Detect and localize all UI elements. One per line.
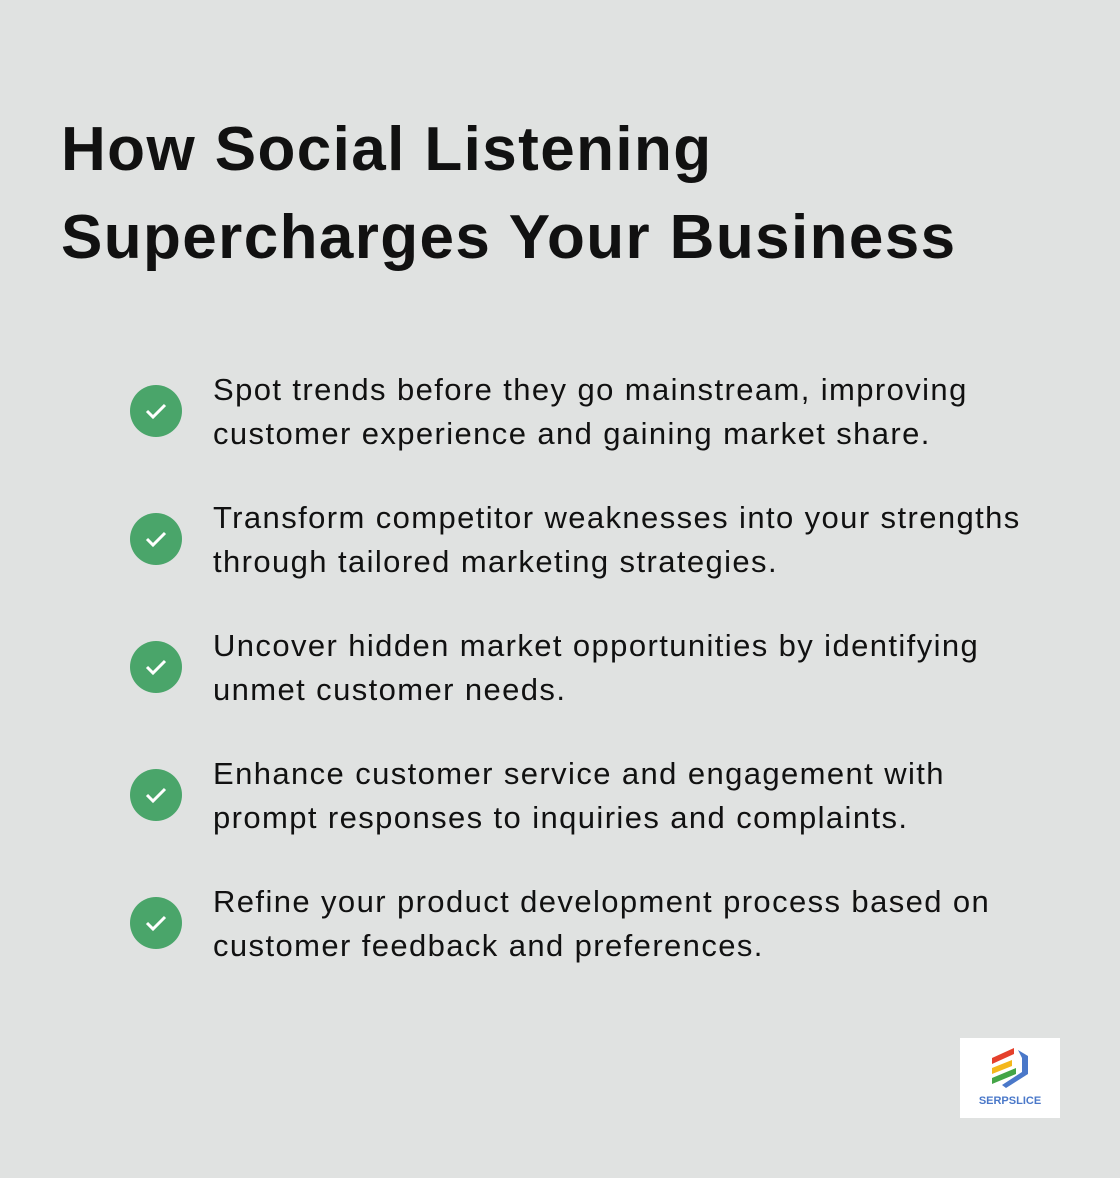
item 5 [130, 884, 990, 963]
icon: check [130, 769, 182, 821]
text 5: Refine your product development process based on [213, 884, 990, 919]
text 5: customer feedback and preferences. [213, 928, 764, 963]
item 3 [130, 628, 979, 707]
icon: check [130, 641, 182, 693]
text 2: through tailored marketing strategies. [213, 544, 778, 579]
text 4: prompt responses to inquiries and complaints. [213, 800, 908, 835]
text 1: Spot trends before they go mainstream, improving [213, 372, 968, 407]
item 1 [130, 372, 968, 451]
text 4: Enhance customer service and engagement with [213, 756, 945, 791]
item 2 [130, 500, 1021, 579]
logo [960, 1038, 1060, 1118]
title [61, 115, 957, 272]
text 3: Uncover hidden market opportunities by identifying [213, 628, 979, 663]
text 3 [213, 628, 979, 707]
item 4 [130, 756, 945, 835]
text 1: customer experience and gaining market share. [213, 416, 931, 451]
title: Supercharges Your Business [61, 203, 957, 272]
logo: SERPSLICE [979, 1095, 1041, 1107]
text 4 [213, 756, 945, 835]
title: How Social Listening [61, 115, 713, 184]
icon: check [130, 385, 182, 437]
text 3: unmet customer needs. [213, 672, 566, 707]
text 2 [213, 500, 1021, 579]
icon: check [130, 513, 182, 565]
text 2: Transform competitor weaknesses into your strengths [213, 500, 1021, 535]
text 5 [213, 884, 990, 963]
icon: check [130, 897, 182, 949]
text 1 [213, 372, 968, 451]
